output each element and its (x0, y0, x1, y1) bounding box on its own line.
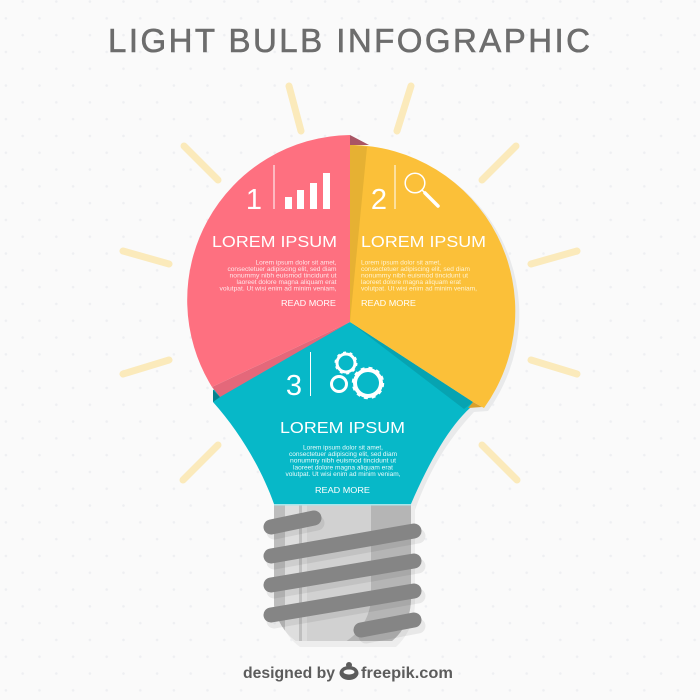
numeral 3: 3 (286, 370, 302, 402)
base shading (274, 503, 411, 645)
panel 2: yellow (350, 145, 515, 408)
icon: magnifier (405, 173, 438, 206)
body text: Lorem ipsum dolor sit amet, (361, 260, 441, 266)
body text: volutpat. Ut wisi enim ad minim veniam, (361, 286, 477, 292)
heading: LOREM IPSUM (280, 420, 405, 437)
teal fold shadow (350, 322, 473, 409)
heading: LOREM IPSUM (212, 234, 337, 251)
body text: consectetuer adipiscing elit, sed diam (361, 266, 470, 273)
body text: laoreet dolore magna aliquam erat (236, 279, 337, 286)
divider (394, 165, 396, 209)
heading: LOREM IPSUM (361, 234, 486, 251)
threads (271, 518, 414, 630)
yellow tip shadow (468, 402, 482, 408)
body text (220, 260, 337, 292)
base shadow (278, 506, 415, 647)
footer credit: designed by (243, 665, 335, 682)
body text: Lorem ipsum dolor sit amet, (303, 444, 383, 452)
divider (274, 165, 275, 209)
body text (286, 444, 401, 478)
panel 3: teal (213, 322, 473, 506)
pink fold (212, 322, 350, 397)
panel 1: pink (187, 135, 369, 397)
body text: laoreet dolore magna aliquam erat (293, 464, 393, 471)
body text: consectetuer adipiscing elit, sed diam (228, 266, 336, 273)
body text: volutpat. Ut wisi enim ad minim veniam, (220, 286, 337, 292)
body text: nonummy nibh euismod tincidunt ut (361, 272, 468, 280)
body text: nonummy nibh euismod tincidunt ut (230, 272, 337, 280)
body text: laoreet dolore magna aliquam erat (361, 279, 461, 286)
numeral 2: 2 (371, 184, 387, 216)
screw base (271, 503, 418, 647)
light rays (123, 86, 577, 480)
icon: bar chart (285, 173, 330, 209)
yellow fold (350, 145, 367, 322)
title: LIGHT BULB INFOGRAPHIC (108, 22, 590, 59)
thread shadows (274, 523, 418, 636)
bulb shadow (350, 148, 519, 510)
divider (310, 352, 311, 396)
footer credit (243, 662, 453, 682)
body text: nonummy nibh euismod tincidunt ut (290, 458, 396, 465)
body text (361, 260, 477, 292)
icon: freepik logo (340, 662, 358, 680)
base body (274, 503, 411, 641)
read more: READ MORE (315, 485, 370, 495)
numeral 1: 1 (246, 184, 262, 216)
body text: volutpat. Ut wisi enim ad minim veniam, (286, 471, 401, 478)
read more: READ MORE (361, 298, 416, 308)
body text: consectetuer adipiscing elit, sed diam (289, 451, 397, 458)
read more: READ MORE (281, 298, 336, 308)
icon: gears (332, 352, 383, 398)
footer credit: freepik.com (361, 665, 453, 682)
body text: Lorem ipsum dolor sit amet, (256, 260, 337, 266)
